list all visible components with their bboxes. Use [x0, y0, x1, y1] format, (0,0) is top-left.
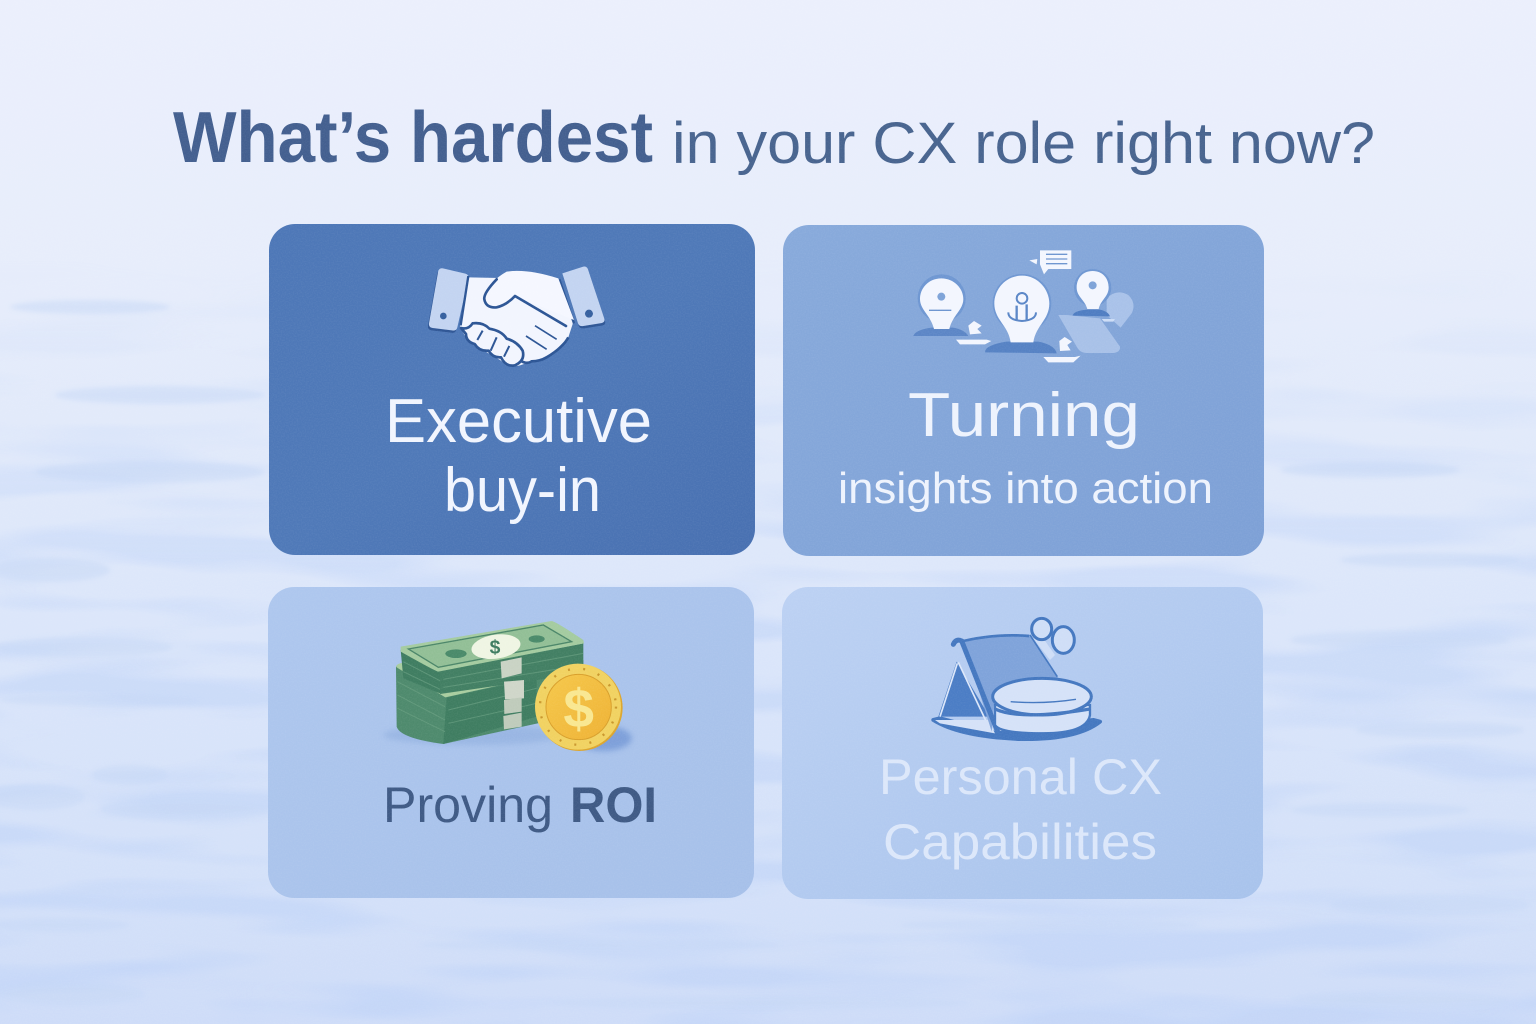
- icon: money stack and coin: [383, 621, 632, 751]
- label: Turning: Turning: [908, 381, 1140, 450]
- label: insights into action: insights into action: [838, 464, 1213, 513]
- label: buy-in: buy-in: [444, 456, 601, 525]
- panel: executive buy-in: [269, 224, 755, 555]
- icon: money stack and coin: $: [490, 637, 501, 658]
- icon: handshake: [428, 267, 605, 366]
- icon: money stack and coin: $: [563, 677, 594, 739]
- label: Proving ROI: [383, 777, 657, 833]
- label: Proving ROI: Proving: [383, 777, 553, 833]
- label: Capabilities: Capabilities: [883, 814, 1157, 870]
- label: Executive: Executive: [385, 387, 652, 456]
- background: pale blue water texture: [0, 301, 1536, 1024]
- title: bold lead: What’s hardest: [173, 98, 653, 178]
- panel: turning insights into action: [783, 225, 1264, 556]
- panel: personal CX capabilities: [782, 587, 1263, 899]
- title: [173, 98, 1375, 178]
- label: Proving ROI: ROI: [570, 777, 657, 833]
- icon: tablet and disc: [933, 618, 1100, 739]
- panel: proving ROI: [268, 587, 754, 898]
- icon: lightbulb people: [913, 250, 1134, 362]
- title: remainder: in your CX role right now?: [672, 111, 1375, 176]
- label: Personal CX: Personal CX: [879, 749, 1162, 805]
